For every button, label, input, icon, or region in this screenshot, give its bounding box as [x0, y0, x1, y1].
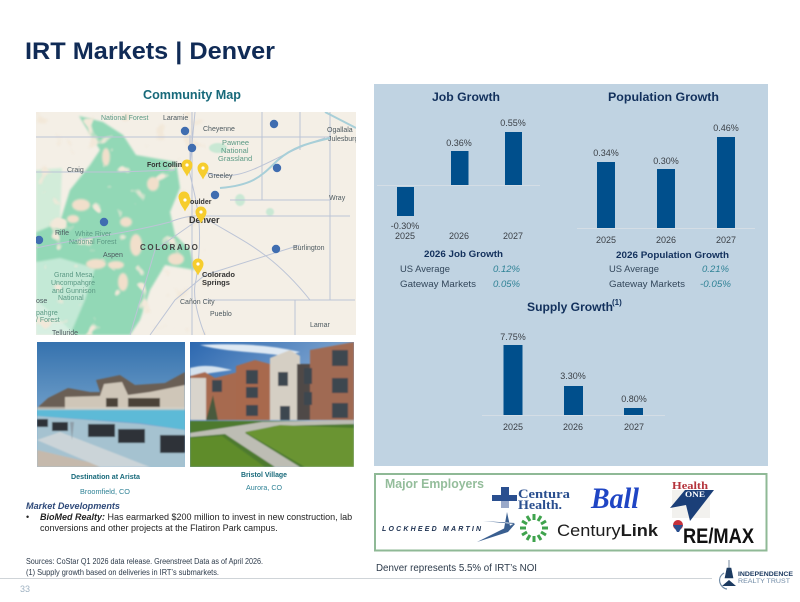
map labels: ose [36, 298, 47, 305]
logo: HealthONE: Health [672, 480, 708, 492]
map labels: pahgre [36, 310, 58, 317]
map: Colorado [35, 112, 358, 337]
bar chart: job growth [377, 118, 540, 241]
map labels: Laramie [163, 115, 188, 122]
logo: Independence Realty Trust: INDEPENDENCE [738, 572, 793, 578]
table: 2026 population growth: Gateway Markets [609, 279, 685, 290]
logo: Ball: Ball [590, 482, 640, 515]
heading: population growth: Population Growth [608, 90, 719, 104]
bar chart: population growth: 2027 [716, 235, 736, 245]
map labels: Aspen [103, 252, 123, 259]
logo: Lockheed Martin: LOCKHEED MARTIN [382, 526, 483, 533]
map labels: National Forest [69, 239, 117, 246]
bar chart: supply growth: 2026 [563, 422, 583, 432]
text block: market developments: BioMed Realty: Has earmarked $200 million to invest in new construction, lab [40, 512, 352, 522]
map labels: Cañon City [180, 299, 215, 306]
table: 2026 job growth: 0.05% [493, 279, 521, 290]
bar chart: population growth: 2025 [596, 235, 616, 245]
caption: Bristol Village [241, 470, 287, 492]
bar chart: supply growth: 0.80% [621, 394, 647, 404]
table: 2026 job growth [400, 249, 521, 290]
logo: Independence Realty Trust [720, 560, 793, 589]
highway shields [35, 120, 281, 253]
bar chart: job growth: -0.30% [391, 221, 419, 231]
map labels: Grand Mesa, [54, 272, 95, 279]
logo: Centura Health: Health. [518, 498, 562, 512]
bar chart: supply growth: 3.30% [560, 371, 586, 381]
table: 2026 job growth: US Average [400, 264, 450, 275]
map labels: Lamar [310, 322, 331, 329]
bar chart: population growth: 0.34% [593, 148, 619, 158]
bar chart: population growth: 0.30% [653, 156, 679, 166]
map labels: Uncompahgre [51, 280, 95, 287]
bar chart: job growth: 0.36% [446, 138, 472, 148]
table: 2026 population growth: -0.05% [700, 279, 732, 290]
map labels: Colorado [202, 270, 235, 279]
bar chart: population growth: 0.46% [713, 123, 739, 133]
bar chart: population growth [577, 123, 755, 245]
table: 2026 job growth: Gateway Markets [400, 279, 476, 290]
map labels: Rifle [55, 230, 69, 237]
map labels: Cheyenne [203, 126, 235, 133]
bar chart: job growth: 2026 [449, 231, 469, 241]
bar chart: job growth: 0.55% [500, 118, 526, 128]
map labels: White River [75, 231, 112, 238]
text block: sources and footnote: (1) Supply growth based on deliveries in IRT’s submarkets. [26, 568, 219, 577]
map labels: Greeley [208, 173, 233, 180]
map labels: Craig [67, 167, 84, 174]
logo: Centura Health: Centura [518, 487, 571, 501]
text block: sources and footnote [26, 557, 263, 577]
map labels: Denver [189, 215, 220, 225]
caption: Bristol Village: Bristol Village [241, 470, 287, 479]
bar chart: supply growth: 2027 [624, 422, 644, 432]
caption: Destination at Arista: Broomfield, CO [80, 487, 130, 496]
table: 2026 job growth: 0.12% [493, 264, 521, 275]
map labels: National Forest [101, 115, 149, 122]
caption: Destination at Arista [71, 472, 141, 496]
map labels: National [221, 146, 249, 155]
text block: market developments: Market Developments [26, 501, 120, 511]
map labels: Telluride [52, 330, 78, 337]
map labels: National [58, 295, 84, 302]
logo: RE/MAX [673, 520, 754, 548]
title: IRT Markets | Denver [25, 38, 275, 65]
logo: HealthONE [670, 480, 714, 521]
bar chart: job growth: 2025 [395, 231, 415, 241]
text block: market developments [26, 501, 352, 533]
note: share of NOI: Denver represents 5.5% of IRT’s NOI [376, 563, 537, 574]
logo: RE/MAX: RE/MAX [683, 525, 754, 548]
map pins [178, 160, 208, 276]
text block: sources and footnote: Sources: CoStar Q1 2026 data release. Greenstreet Data as of April 2026. [26, 557, 263, 566]
logo: CenturyLink sunburst [520, 514, 548, 542]
panel: major employers [375, 474, 766, 550]
caption: Bristol Village: Aurora, CO [246, 483, 282, 492]
bar chart: supply growth: 2025 [503, 422, 523, 432]
map labels: COLORADO [140, 243, 199, 252]
map labels: and Gunnison [52, 288, 96, 295]
map labels: Julesburg [328, 136, 358, 143]
caption: Destination at Arista: Destination at Arista [71, 472, 141, 481]
heading: job growth: Job Growth [432, 90, 500, 104]
photo: Destination at Arista [37, 342, 185, 467]
map labels: Grassland [218, 154, 252, 163]
map labels [36, 115, 358, 337]
map labels: Burlington [293, 245, 325, 252]
text block: market developments: conversions and other projects at the Flatiron Park campus. [40, 523, 278, 533]
heading: community map: Community Map [143, 87, 241, 102]
page number: 33 [20, 584, 30, 594]
bar chart: supply growth [482, 332, 665, 432]
bar chart: job growth: 2027 [503, 231, 523, 241]
bar chart: supply growth: 7.75% [500, 332, 526, 342]
map labels: Springs [202, 278, 230, 287]
bar chart: population growth: 2026 [656, 235, 676, 245]
map labels: Wray [329, 195, 346, 202]
logo: Independence Realty Trust: REALTY TRUST [738, 579, 790, 585]
table: 2026 population growth: US Average [609, 264, 659, 275]
logo: HealthONE: ONE [685, 490, 705, 499]
map labels: Fort Collins [147, 162, 186, 169]
table: 2026 population growth: 0.21% [702, 264, 730, 275]
logo: Lockheed Martin [382, 512, 515, 542]
heading: major employers: Major Employers [385, 477, 484, 491]
panel: growth charts [374, 84, 768, 466]
table: 2026 population growth [609, 250, 732, 290]
map labels: / Forest [36, 317, 60, 324]
map labels: Pawnee [222, 138, 249, 147]
text block: market developments: • [26, 512, 29, 522]
table: 2026 job growth: 2026 Job Growth [424, 249, 503, 260]
heading: supply growth: Supply Growth [527, 300, 613, 314]
map labels: Pueblo [210, 311, 232, 318]
logo: Centura Health [492, 487, 571, 512]
table: 2026 population growth: 2026 Population Growth [616, 250, 729, 261]
heading: supply growth: (1) [612, 298, 622, 307]
map labels: Ogallala [327, 127, 353, 134]
map labels: Boulder [185, 199, 212, 206]
photo: Bristol Village [190, 342, 354, 467]
logo: CenturyLink: CenturyLink [557, 521, 659, 540]
